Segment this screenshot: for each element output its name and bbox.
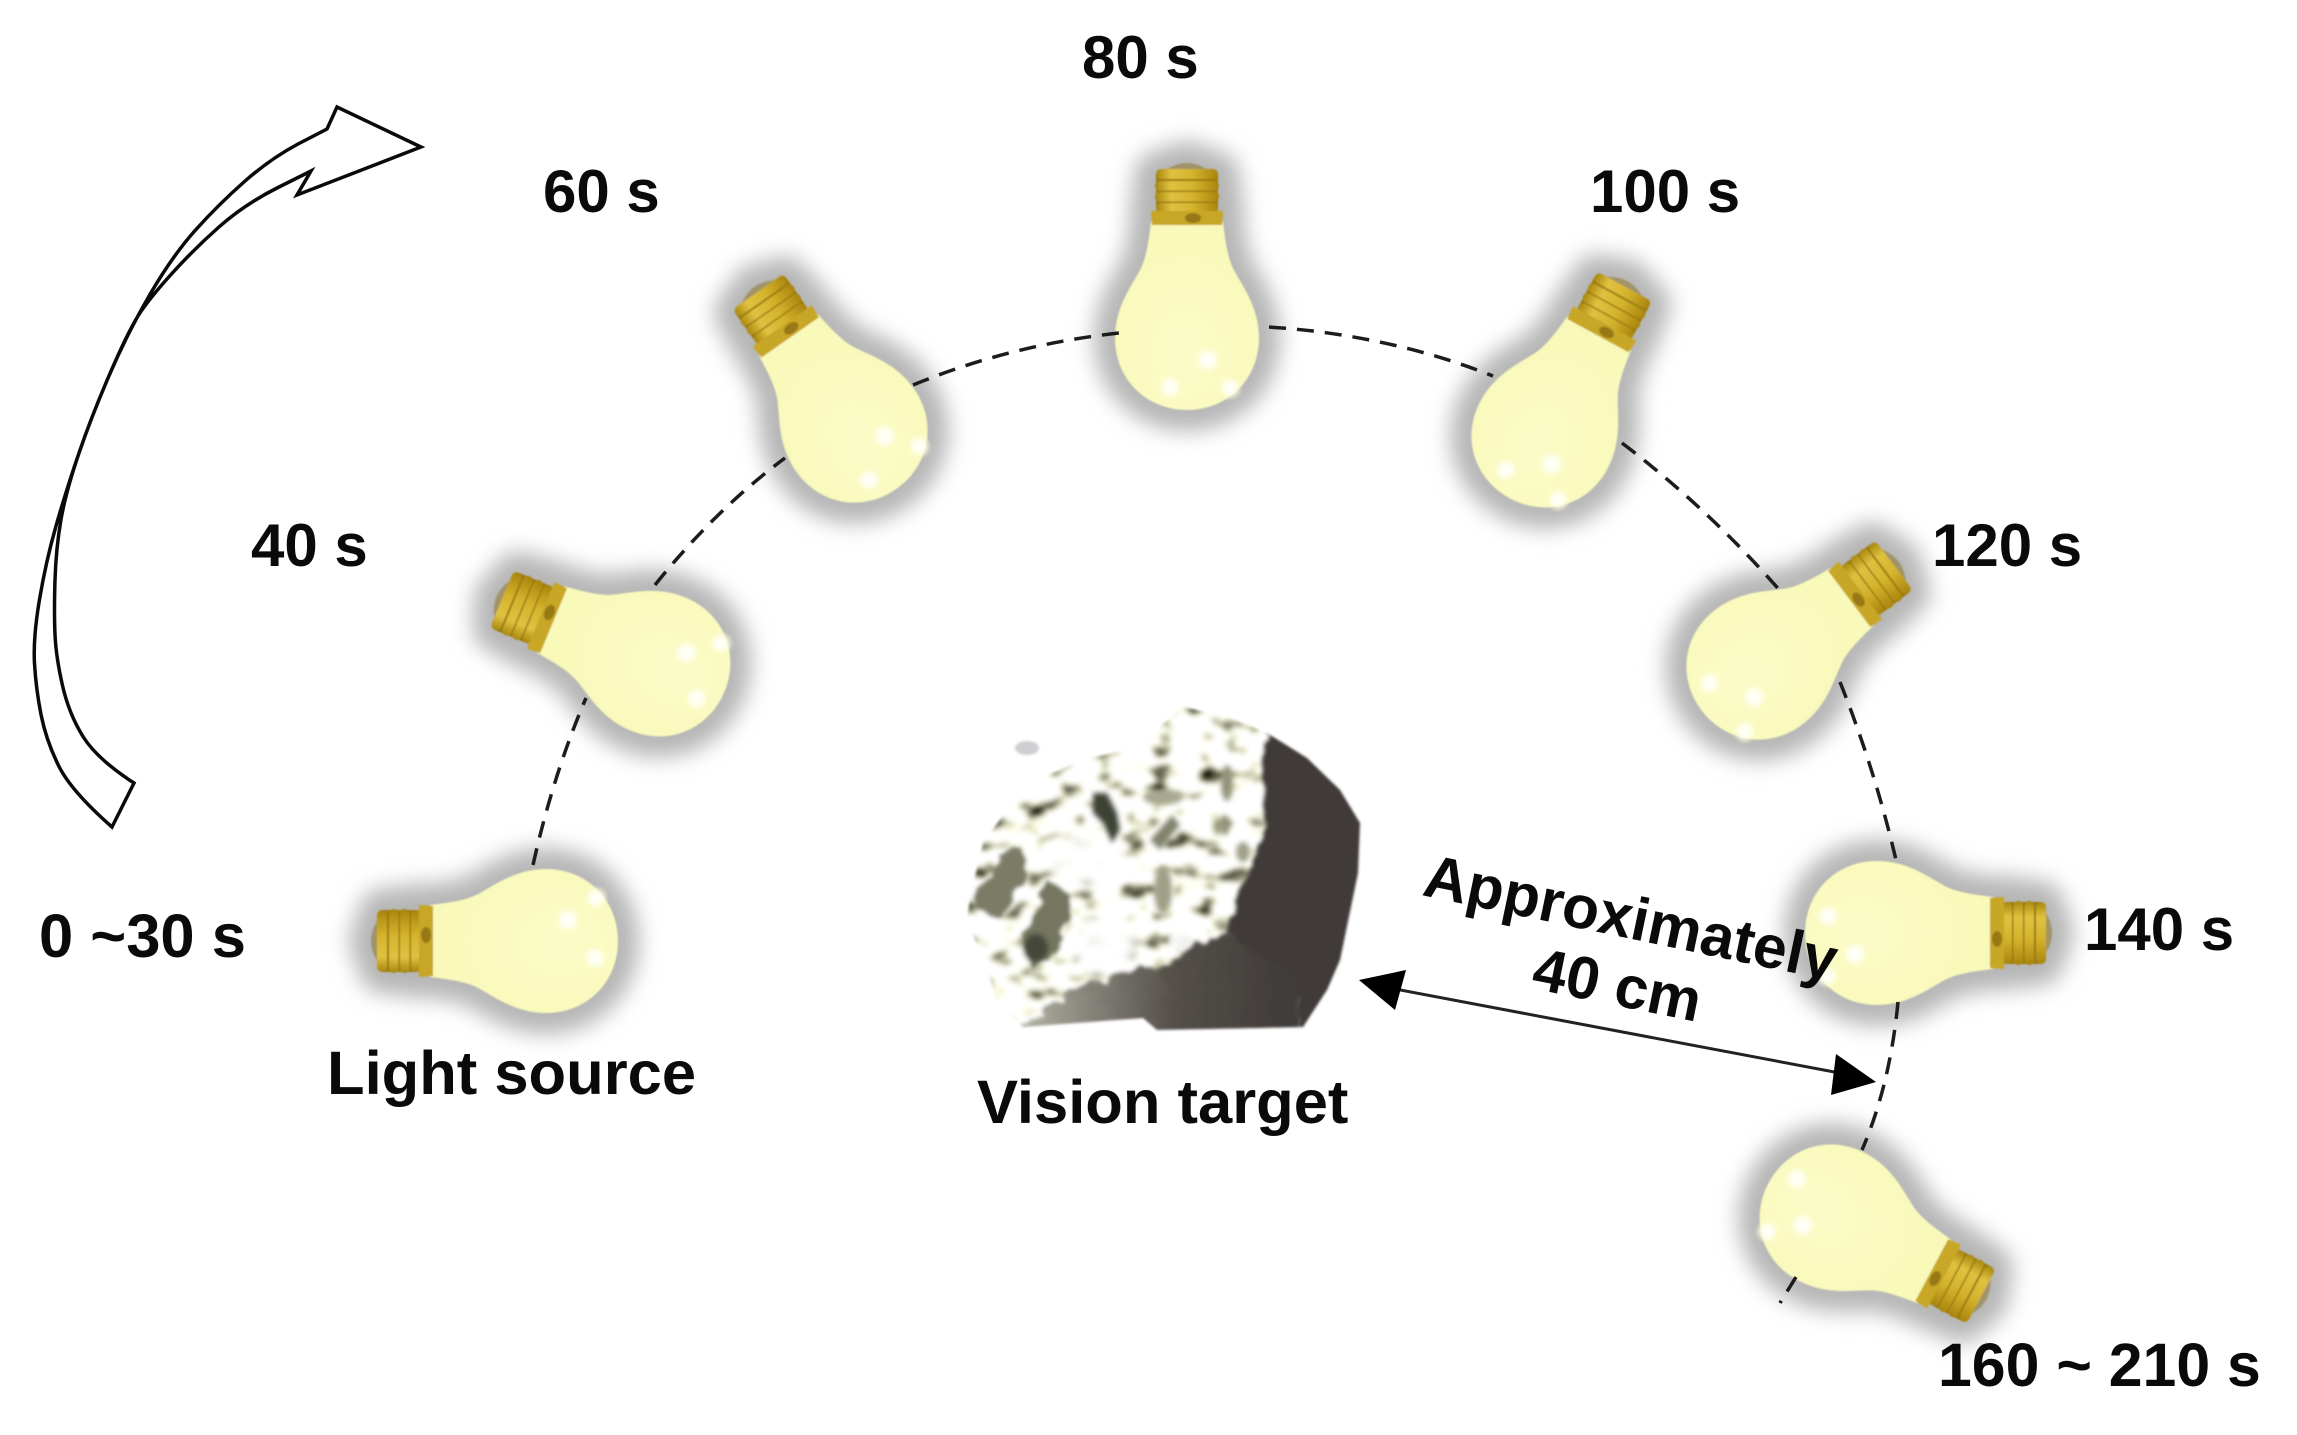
time label: 0~30 s: 0 ~30 s — [39, 902, 246, 971]
label: vision target: Vision target — [977, 1068, 1348, 1137]
rock dark side — [1227, 732, 1370, 1040]
time label: 120 s: 120 s — [1932, 512, 2082, 579]
rock shaded underside — [1020, 930, 1302, 1032]
time label: 80 s: 80 s — [1082, 24, 1199, 91]
time label: 160~210 s: 160 ~ 210 s — [1938, 1331, 2261, 1399]
dashed arc: path of the light source — [533, 327, 1898, 1303]
time label: 100 s: 100 s — [1590, 158, 1740, 225]
rock stray fragment — [1015, 741, 1039, 755]
icon: light bulb at 100 s — [1446, 246, 1691, 533]
illustration: vision target rock — [960, 700, 1370, 1040]
label: approximately: Approximately — [1418, 841, 1844, 994]
icon: light bulb at 120 s — [1658, 504, 1943, 768]
rock light face — [966, 706, 1270, 1020]
icon: light bulb at 60 s — [695, 245, 955, 530]
label: 40 cm: 40 cm — [1527, 935, 1707, 1035]
icon: light bulb at 40 s — [468, 530, 752, 758]
icon: light bulb at 80 s — [1115, 162, 1259, 410]
time label: 40 s: 40 s — [251, 512, 368, 579]
double-headed arrow: approximately 40 cm distance — [1359, 970, 1876, 1095]
time label: 60 s: 60 s — [543, 158, 660, 225]
icon: curved arrow showing direction of light movement — [34, 107, 421, 827]
icon: light bulb at 140 s — [1805, 861, 2053, 1005]
icon: light bulb at 160~210 s — [1735, 1120, 2021, 1363]
label: light source: Light source — [327, 1039, 696, 1108]
icon: light bulb at 0~30 s — [370, 869, 618, 1013]
time label: 140 s: 140 s — [2084, 896, 2234, 963]
